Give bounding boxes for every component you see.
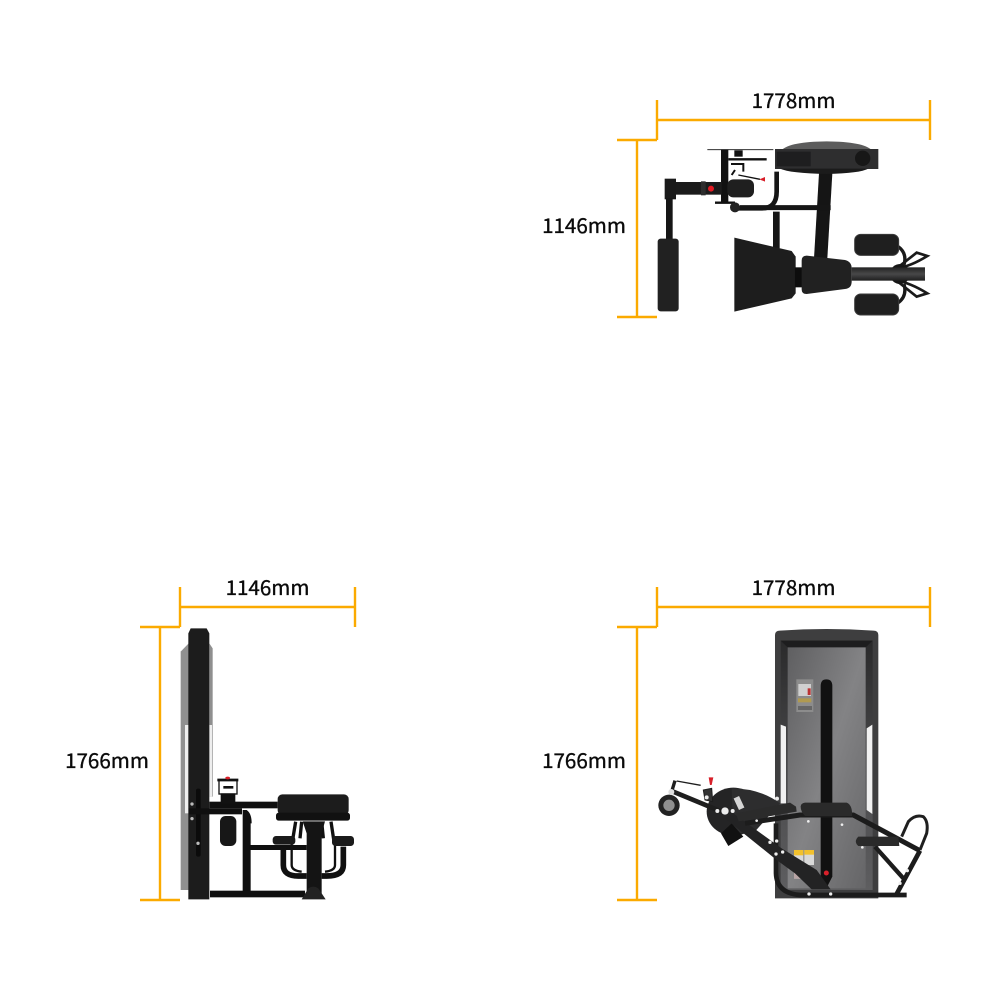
frame bolts [755,819,909,896]
side view height dimension: 1766mm [65,744,149,774]
arm beam [189,802,278,814]
right seat pad [801,803,852,816]
inner side bands [781,641,873,890]
front panel edge [209,643,213,797]
front view width dimension [657,571,930,627]
rear cam disc [707,788,780,846]
foot pads [273,836,354,846]
main frame column [188,628,209,899]
outer frame [775,629,878,898]
cam cylinder [727,179,754,197]
handles [890,247,927,303]
side view width dimension [180,571,355,627]
pivot hub [705,795,779,815]
weight selector head [217,780,238,803]
seat pedestal [302,821,326,899]
foot pads [855,234,899,315]
hand grip loop [902,816,927,850]
front view width dimension: 1778mm [752,571,835,601]
pivot arm assembly [707,149,773,212]
weight stack pin [824,870,829,875]
top view depth dimension: 1146mm [542,209,626,239]
white side strips [185,725,212,813]
front view height dimension [542,627,657,900]
back seat pad [734,238,796,312]
horizontal lever arm [665,179,722,199]
seat connector [795,267,803,287]
top view width dimension: 1778mm [752,84,835,114]
central grey panel [788,647,866,888]
left seat pad [736,803,797,821]
front seat pad [802,256,852,294]
top inner shadow [781,641,873,647]
red pull pin [708,177,765,192]
back panel from above [775,141,878,174]
angled arm frame [725,813,831,889]
roller shaft and roller pad [658,198,679,311]
top view depth dimension [542,140,657,317]
side view width dimension: 1146mm [226,571,309,601]
seat beam and supports [745,815,920,894]
front view height dimension: 1766mm [542,744,626,774]
instruction placard [796,679,813,712]
top view width dimension [657,84,930,140]
support post [210,810,307,897]
side view machine illustration [181,628,354,899]
crossbar and curved tube [735,172,831,248]
weight slot [821,679,832,888]
white side strips [781,725,872,814]
warning labels [794,850,814,879]
frame rail [852,267,925,281]
seat cushion [276,794,350,821]
upright post [814,173,832,258]
frame tube and base rail [776,823,907,895]
curved foot tubes [283,822,343,876]
red pop pin [709,777,713,785]
cam cylinder [220,816,236,846]
front view panel [542,571,930,900]
top view panel [542,84,930,317]
thigh pad [856,837,899,846]
pivot plate [190,789,201,857]
side view panel [65,571,355,900]
lever arm [672,781,722,812]
side view height dimension [65,627,180,900]
small roller [658,789,680,816]
rear panel [181,643,189,890]
top view machine illustration [658,141,927,315]
red knob [225,777,230,779]
front view machine illustration [658,629,927,898]
